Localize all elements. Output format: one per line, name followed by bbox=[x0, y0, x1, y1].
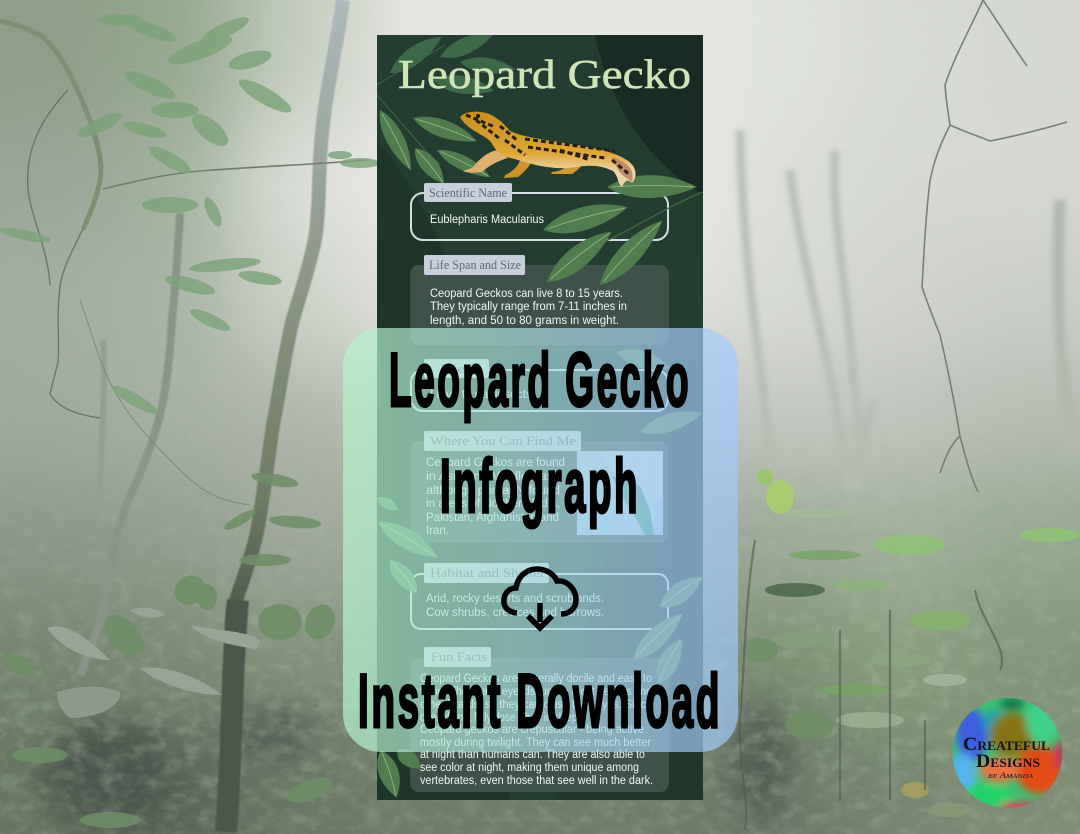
logo text bbox=[963, 734, 1050, 780]
icon: cloud download bbox=[504, 569, 576, 628]
illustration: leopard gecko bbox=[460, 112, 636, 187]
label: fun facts bbox=[424, 647, 491, 667]
leaves: right cluster bbox=[540, 175, 703, 292]
label: diet bbox=[424, 359, 489, 378]
habitat and shelter box bbox=[411, 563, 668, 629]
logo text: by Amanda bbox=[988, 771, 1033, 780]
headline: infograph: Infograph bbox=[440, 444, 640, 529]
foliage: large grey leaves bbox=[47, 608, 260, 718]
label: habitat: Habitat and Shelter bbox=[430, 565, 546, 580]
text: fun facts body: often do not fully dose when in sleep. bbox=[420, 712, 580, 724]
text: where body: in Asia and Middle East, bbox=[426, 471, 560, 483]
scientific name box bbox=[411, 183, 668, 240]
text: where body: Pakistan, Afghanistan and bbox=[426, 512, 559, 524]
label: diet: Diet bbox=[440, 361, 471, 376]
label: life span bbox=[424, 255, 525, 275]
leaves: upper left cluster bbox=[377, 94, 490, 183]
foliage: lower left green leaves bbox=[0, 470, 340, 828]
text: diet body: I love to eat insects bbox=[430, 389, 532, 401]
logo: createful designs badge bbox=[952, 698, 1062, 808]
panel: infographic poster bbox=[372, 26, 708, 800]
text: fun facts body: Ceopard Geckos are generally docile and easy to bbox=[420, 673, 652, 685]
text: life span body: They typically range from 7-11 inches in bbox=[430, 301, 627, 313]
text: fun facts body: at night than humans can. They are also able to bbox=[420, 749, 645, 761]
text: where body: Iran. bbox=[426, 525, 449, 537]
text: where body: Ceopard Geckos are found bbox=[426, 457, 565, 469]
text: Leopard Gecko bbox=[389, 338, 691, 423]
logo text: Designs bbox=[976, 751, 1040, 772]
text: fun facts body: see color at night, making them unique among bbox=[420, 762, 639, 774]
diet box bbox=[411, 359, 668, 411]
map of south asia bbox=[577, 451, 663, 535]
text: habitat body: Arid, rocky deserts and scrublands. bbox=[426, 593, 604, 605]
leaves: behind the title bbox=[377, 35, 516, 94]
leaves: lower left and right bbox=[372, 343, 708, 800]
logo text: Createful bbox=[963, 734, 1050, 755]
label: where: Where You Can Find Me bbox=[430, 433, 576, 448]
text: habitat body bbox=[426, 593, 604, 619]
text: where body bbox=[426, 457, 565, 537]
label: where bbox=[424, 431, 581, 451]
label: scientific name: Scientific Name bbox=[429, 185, 507, 200]
text: habitat body: Cow shrubs, crevices and burrows. bbox=[426, 607, 604, 619]
title: leopard gecko: Leopard Gecko bbox=[398, 51, 691, 97]
text: fun facts body: tame. They have eyelids, unlike most geckos and bbox=[420, 686, 652, 698]
label: habitat bbox=[424, 563, 549, 583]
label: life span: Life Span and Size bbox=[429, 257, 521, 272]
foliage: right bright green leaves bbox=[742, 469, 1080, 817]
fun facts card bbox=[410, 647, 669, 792]
overlay: green to blue rounded panel bbox=[343, 328, 738, 752]
text: life span body bbox=[430, 288, 627, 327]
text: where body: in areas of Northern India, bbox=[426, 498, 560, 510]
text: fun facts body: Ceopard geckos are crepuscular - being active bbox=[420, 724, 644, 736]
text: life span body: length, and 50 to 80 grams in weight. bbox=[430, 315, 619, 327]
where you can find me card bbox=[410, 431, 668, 543]
text: fun facts body: other lizards, so they can close their eyes. Since bbox=[420, 699, 652, 711]
text: fun facts body bbox=[420, 673, 653, 787]
text: species name: Eublepharis Macularius bbox=[430, 214, 544, 226]
life span and size card bbox=[410, 255, 669, 345]
text: life span body: Ceopard Geckos can live 8 to 15 years. bbox=[430, 288, 623, 300]
text: fun facts body: vertebrates, even those that see well in the dark. bbox=[420, 775, 653, 787]
headline: instant download: Instant Download bbox=[358, 659, 722, 744]
text: fun facts body: mostly during twilight. They can see much better bbox=[420, 737, 651, 749]
foliage: upper left leaves bbox=[0, 13, 380, 418]
label: fun facts: Fun Facts bbox=[431, 649, 487, 664]
text: where body: although primarily found bbox=[426, 485, 560, 497]
